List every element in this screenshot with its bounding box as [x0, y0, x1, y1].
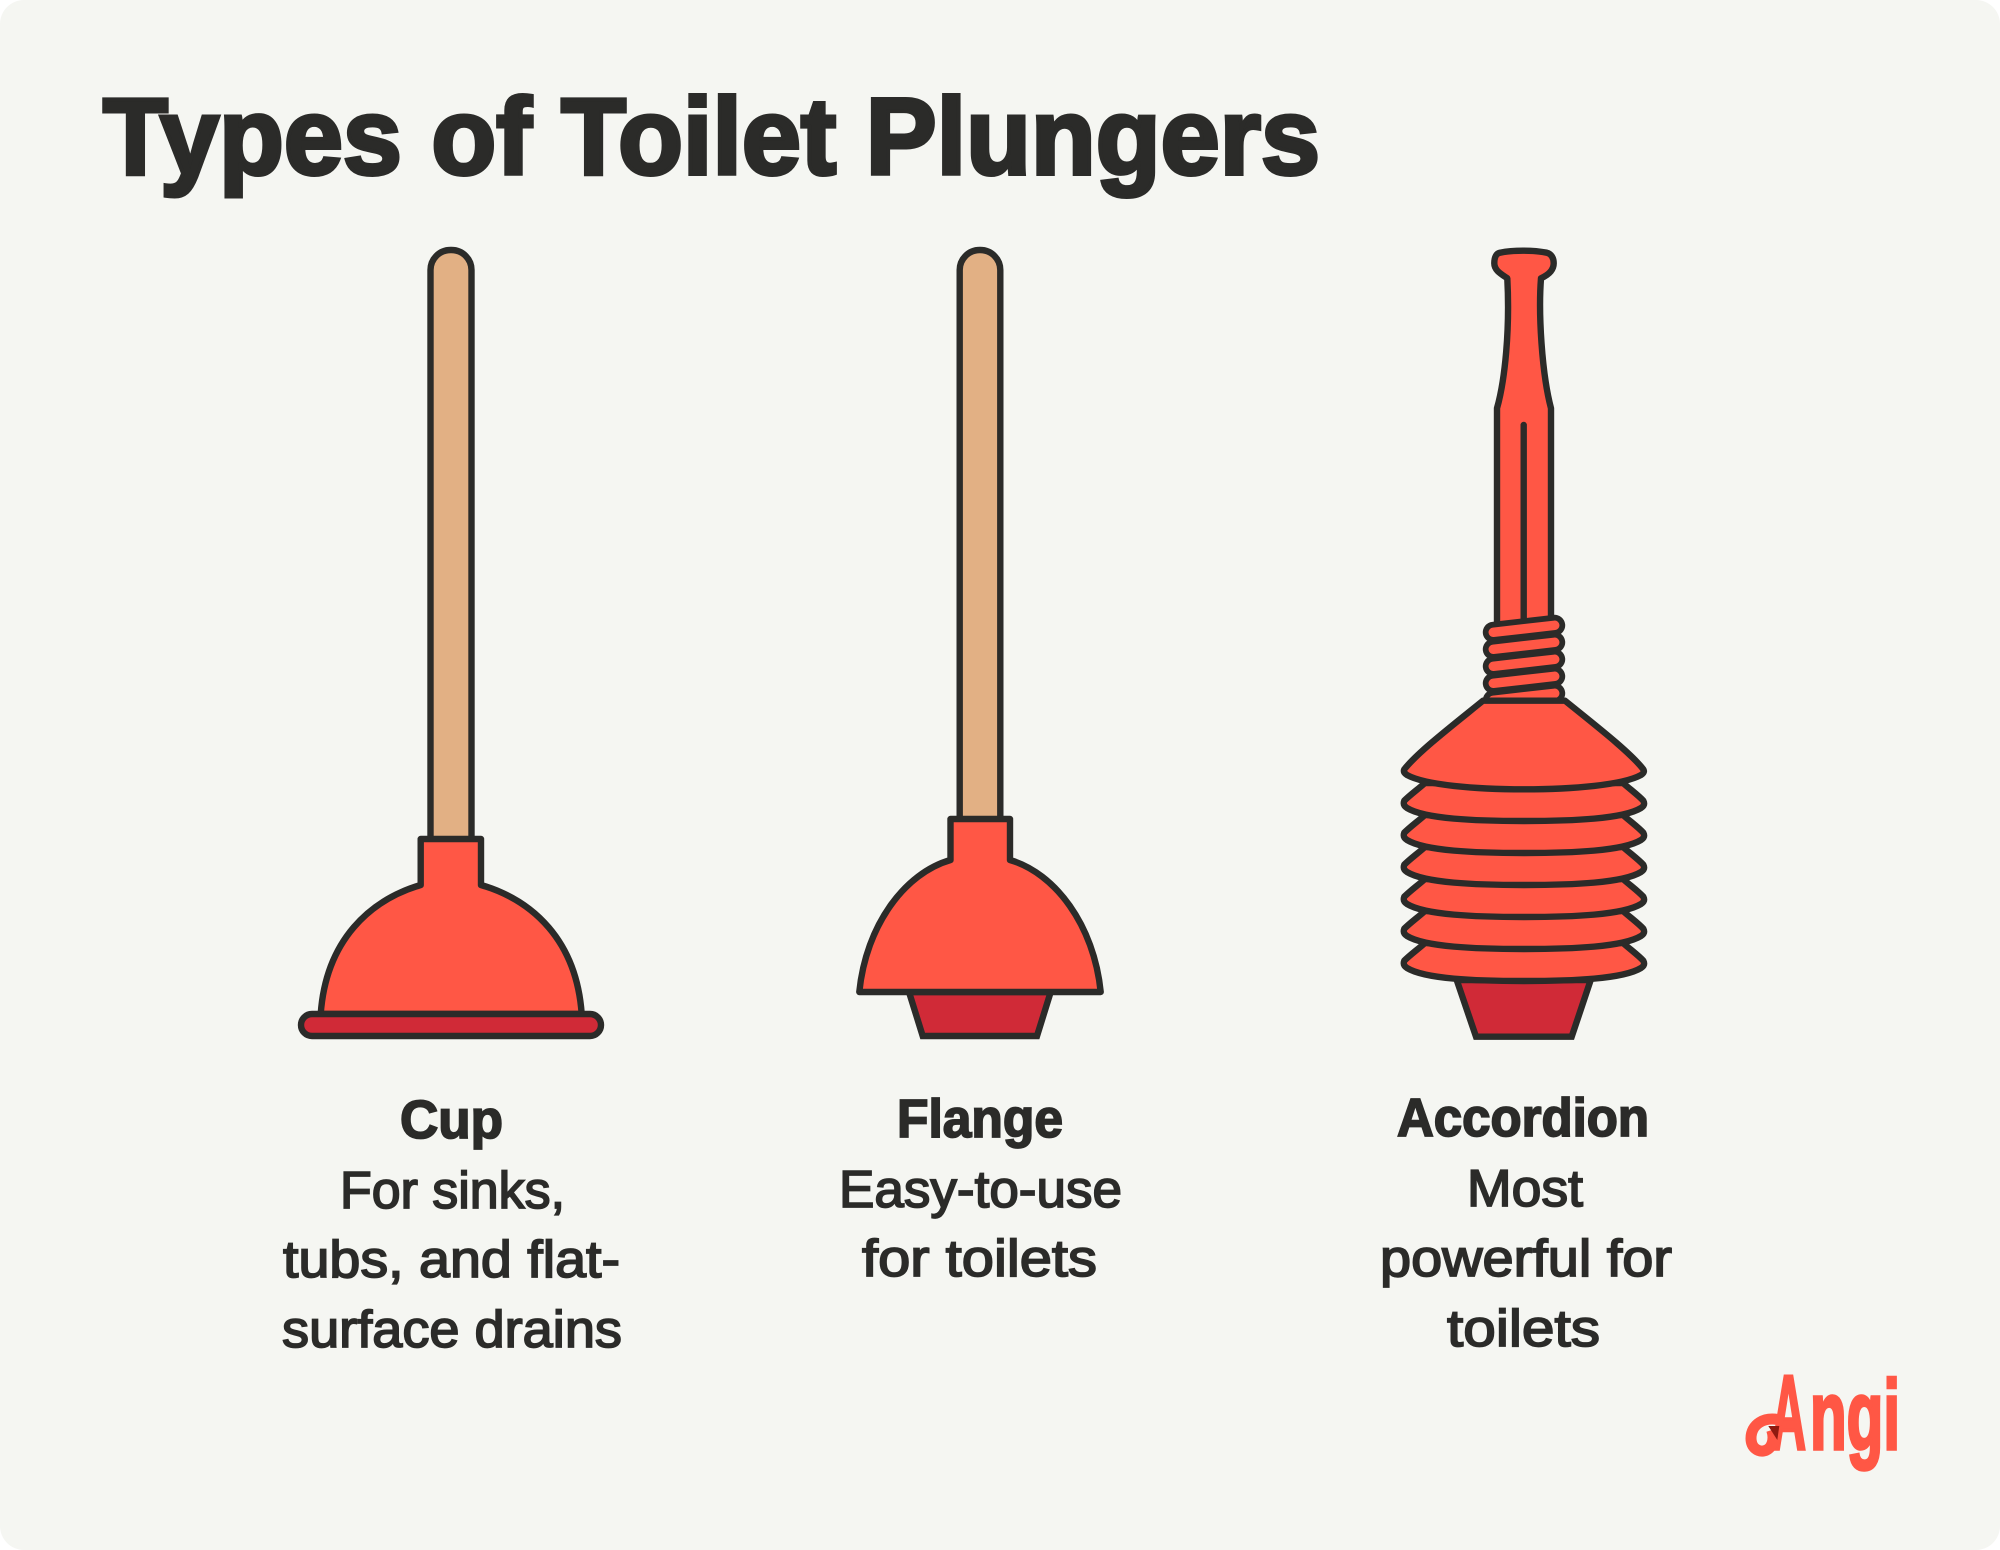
- spring coils: [1493, 625, 1555, 700]
- icon: flange plunger: [859, 250, 1101, 1036]
- suction cup base: [1457, 980, 1591, 1037]
- cone: [1404, 701, 1644, 789]
- icon: accordion plunger: [1404, 251, 1644, 1037]
- heading: accordion: Accordion: [1397, 1088, 1649, 1148]
- logo: Angi: A: [1771, 1354, 1806, 1472]
- text: accordion description: Most: [1467, 1160, 1584, 1218]
- text: cup description: tubs, and flat-: [283, 1231, 620, 1289]
- text: cup description: For sinks,: [340, 1162, 565, 1220]
- text: flange description: [839, 1161, 1122, 1288]
- heading: cup: Cup: [400, 1090, 503, 1150]
- text: flange description: Easy-to-use: [839, 1161, 1122, 1219]
- text: accordion description: [1380, 1160, 1672, 1358]
- text: flange description: for toilets: [862, 1230, 1097, 1288]
- text: cup description: [282, 1162, 622, 1359]
- handle slot: [1520, 425, 1527, 620]
- logo: Angi: [1751, 1354, 1900, 1472]
- panel: accordion plunger: [1380, 251, 1672, 1358]
- title: Types of Toilet Plungers: [103, 76, 1320, 198]
- text: accordion description: toilets: [1447, 1300, 1600, 1358]
- text: cup description: surface drains: [282, 1301, 622, 1359]
- icon: cup plunger: [301, 250, 601, 1036]
- handle: [1494, 251, 1554, 626]
- bellows: [1404, 943, 1644, 981]
- panel: cup plunger: [282, 250, 622, 1359]
- text: accordion description: powerful for: [1380, 1230, 1672, 1288]
- logo: Angi: ngi: [1810, 1360, 1900, 1470]
- heading: flange: Flange: [897, 1089, 1063, 1149]
- panel: flange plunger: [839, 250, 1122, 1288]
